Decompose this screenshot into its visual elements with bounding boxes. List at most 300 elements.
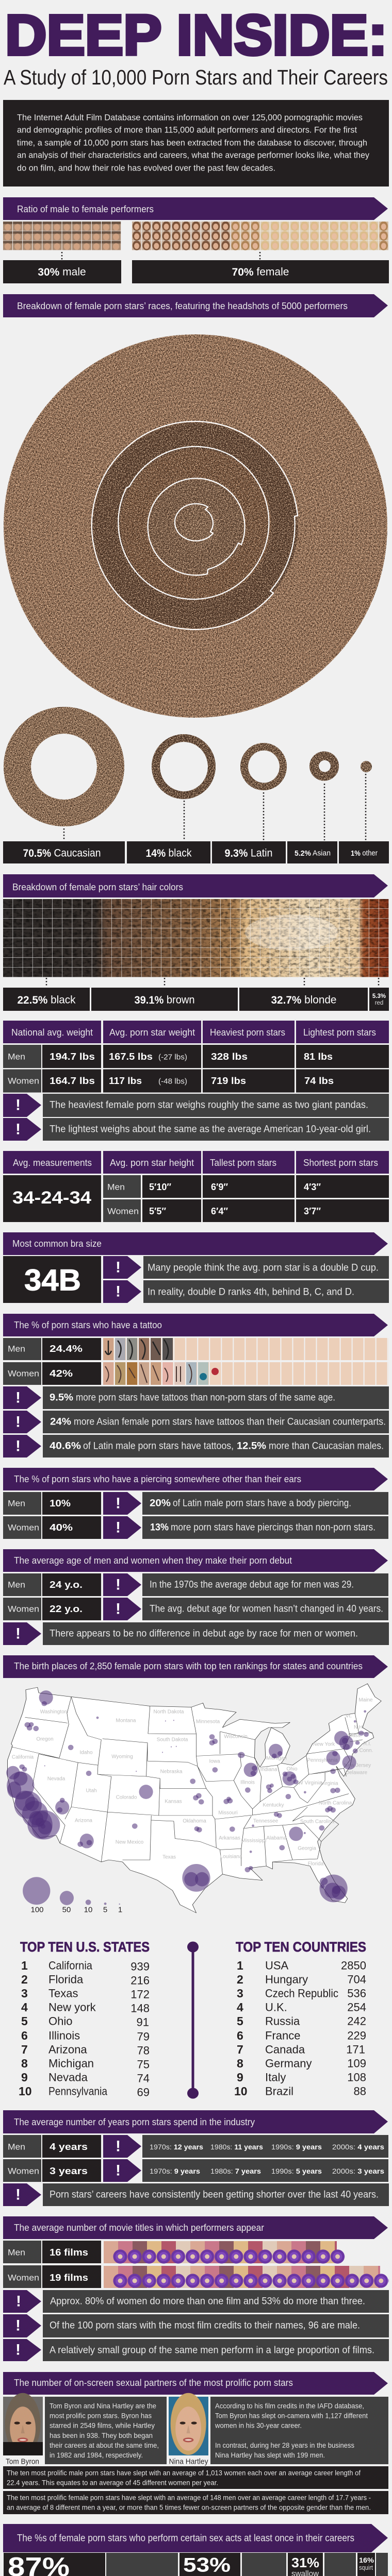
measurements header: Avg. measurements	[13, 1158, 92, 1168]
piercing row: men: of Latin male porn stars have a body piercing.	[173, 1498, 351, 1509]
section heading: bra size: Most common bra size	[12, 1239, 102, 1249]
section heading: hair colors: Breakdown of female porn stars’ hair colors	[12, 882, 183, 892]
career row: men	[3, 2135, 388, 2158]
map state names: South Carolina	[300, 1819, 335, 1825]
race rings row	[4, 707, 372, 840]
top ten countries: 109	[347, 2057, 366, 2070]
bubble size legend: 1	[118, 1905, 122, 1914]
debut row: men: Men	[8, 1580, 25, 1590]
top ten countries: Brazil	[265, 2084, 293, 2098]
top ten countries: TOP TEN COUNTRIES	[236, 1939, 366, 1955]
women weights: 164.7 lbs	[50, 1076, 95, 1086]
section heading: movie titles: The average number of movie titles in which performers appear	[14, 2223, 264, 2233]
treemap: sex act percentages	[4, 2552, 388, 2576]
map state names: Nebraska	[160, 1769, 183, 1774]
career row: men: 1990s: 9 years	[271, 2143, 322, 2151]
map state names: Oregon	[36, 1736, 54, 1742]
top ten countries: 5	[237, 2014, 243, 2028]
weight table	[3, 1021, 389, 1092]
piercing row: women: !	[116, 1519, 121, 1536]
note: lightest	[3, 1118, 389, 1141]
top ten states: TOP TEN U.S. STATES	[20, 1939, 150, 1955]
portrait: Tom Byron: Tom Byron	[6, 2458, 39, 2466]
weight table header: National avg. weight	[11, 1027, 93, 1038]
note: heaviest: !	[15, 1096, 21, 1114]
text: Byron and Hartley partners: In contrast, during her 28 years in the business	[215, 2442, 354, 2449]
note: 100 most credited	[3, 2314, 389, 2337]
piercing row: men: 10%	[50, 1498, 71, 1509]
map state names: Indiana	[260, 1767, 277, 1772]
stat: male average: The ten most prolific male porn stars have slept with an average of 1,013 women each over an average career length of	[7, 2469, 361, 2477]
map state names: Vt.	[346, 1714, 352, 1719]
text: prolific stars: starred in 2549 films, while Hartley	[50, 2421, 155, 2430]
debut row: men: 24 y.o.	[50, 1580, 83, 1590]
hair color percentages: red	[375, 1000, 383, 1006]
note: Latin male tattoos	[3, 1435, 389, 1458]
piercing row: men: Men	[8, 1498, 25, 1509]
male headshots	[3, 222, 121, 250]
map state names: New Jersey	[344, 1763, 371, 1768]
top ten countries: 3	[237, 1987, 243, 2000]
section heading: tattoos	[3, 1314, 388, 1336]
top ten countries: Hungary	[265, 1973, 308, 1986]
map outline and states	[8, 1684, 381, 1913]
career row: women: !	[116, 2162, 121, 2179]
piercing row: men	[3, 1492, 388, 1515]
top ten countries	[234, 1939, 366, 2098]
women weights: 74 lbs	[304, 1076, 334, 1086]
text: Byron and Hartley partners: Tom Byron has slept on-camera with 1,127 different	[215, 2412, 368, 2419]
top ten states: Ohio	[48, 2014, 72, 2028]
text: Byron and Hartley partners: women in his 30-year career.	[215, 2421, 302, 2430]
female share: 70% female	[232, 266, 289, 278]
text: prolific stars: Tom Byron and Nina Hartley are the	[50, 2402, 156, 2410]
map state names: Louisiana	[220, 1854, 242, 1860]
ring: other	[361, 761, 372, 772]
top ten countries: 9	[237, 2071, 243, 2084]
top ten countries: Canada	[265, 2043, 305, 2056]
top ten states: 5	[21, 2014, 28, 2028]
top ten countries: 8	[237, 2057, 243, 2070]
top ten states: 7	[21, 2043, 28, 2056]
map state names: New Mexico	[116, 1839, 144, 1845]
top ten countries: Germany	[265, 2057, 312, 2070]
hair color percentages: 39.1% brown	[134, 994, 195, 1006]
note: 100 most credited: !	[15, 2317, 21, 2334]
section heading: on-screen partners: The number of on-screen sexual partners of the most prolific porn stars	[14, 2378, 293, 2388]
debut row: women: Women	[8, 1604, 39, 1614]
men weights: Men	[8, 1052, 25, 1061]
map state names: California	[12, 1755, 34, 1760]
note: small group of men: A relatively small group of the same men perform in a large proportion of films.	[50, 2345, 374, 2355]
top ten countries: U.K.	[265, 2001, 287, 2013]
bubble size legend: 5	[103, 1905, 107, 1914]
top ten states: 216	[130, 1974, 150, 1987]
top ten states: 75	[137, 2058, 150, 2071]
map state names: W Virginia	[298, 1781, 322, 1786]
top ten states: Florida	[48, 1973, 84, 1986]
intro panel: do on film, and how their role has evolved over the past few decades.	[17, 163, 275, 173]
intro panel	[3, 100, 389, 187]
race percentages: 9.3% Latin	[225, 847, 272, 859]
note: careers getting shorter	[3, 2183, 389, 2206]
piercing row: women: 13%	[150, 1522, 169, 1533]
map state names: Pennsylvania	[307, 1758, 338, 1763]
bra size value	[3, 1256, 101, 1303]
film covers and discs: men	[104, 2241, 345, 2264]
section heading: piercings: The % of porn stars who have a piercing somewhere other than their ears	[14, 1474, 301, 1484]
top ten states: 4	[21, 2001, 28, 2014]
ring: Caucasian	[4, 707, 124, 826]
note: Asian female tattoos: !	[15, 1414, 21, 1430]
note: 80 percent of women	[3, 2290, 389, 2313]
top ten countries: 704	[347, 1973, 366, 1986]
note: double D rank	[103, 1280, 389, 1303]
map state names: Iowa	[209, 1759, 220, 1764]
note: tattoos vs non porn stars: 9.5%	[50, 1392, 73, 1403]
map state names: Tennessee	[253, 1819, 279, 1824]
section heading: on-screen partners	[3, 2372, 388, 2395]
career row: women: 1980s: 7 years	[210, 2167, 261, 2175]
top ten states: 2	[21, 1973, 28, 1986]
top ten states: 1	[21, 1959, 28, 1972]
note: 80 percent of women: !	[16, 2293, 21, 2310]
measurements table	[3, 1151, 389, 1222]
section heading: race breakdown	[3, 294, 388, 317]
ring: Asian	[309, 751, 339, 781]
note: double D belief	[103, 1256, 389, 1279]
map state names: Kansas	[165, 1799, 182, 1804]
career row: men: 2000s: 4 years	[332, 2143, 384, 2151]
male share	[3, 260, 121, 283]
note: 100 most credited: Of the 100 porn stars with the most film credits to their names, 96 are male.	[50, 2320, 360, 2331]
tattoo row: women: Women	[8, 1368, 39, 1379]
hair color percentages: 32.7% blonde	[271, 994, 336, 1006]
films row: men	[3, 2241, 345, 2264]
top ten states: 8	[21, 2057, 28, 2070]
text: Byron and Hartley partners: According to his film credits in the IAFD database,	[215, 2402, 364, 2410]
top ten states: Illinois	[48, 2029, 80, 2042]
top ten states: 74	[137, 2072, 150, 2084]
measurements header: Shortest porn stars	[303, 1158, 378, 1168]
top ten states: 9	[21, 2071, 28, 2084]
debut row: women: !	[116, 1600, 121, 1618]
map state names: Illinois	[240, 1780, 255, 1786]
map state names: Nevada	[47, 1776, 66, 1782]
map state names: Michigan	[266, 1756, 287, 1761]
tattoo row: women: 42%	[50, 1368, 73, 1379]
section heading: race breakdown: Breakdown of female porn stars’ races, featuring the headshots of 5000 performers	[17, 301, 348, 311]
top ten states: 3	[21, 1987, 28, 2000]
map state names: Idaho	[79, 1750, 93, 1756]
stat: female average	[3, 2491, 388, 2514]
top ten states: California	[48, 1959, 93, 1972]
top ten states: 10	[19, 2084, 32, 2098]
men weights: (-27 lbs)	[158, 1053, 187, 1061]
films row: men: 16 films	[50, 2247, 88, 2258]
weight table header: Heaviest porn stars	[210, 1027, 285, 1038]
note: Asian female tattoos: 24%	[50, 1417, 71, 1427]
top ten states: 6	[21, 2029, 28, 2042]
note: Latin male tattoos: !	[15, 1437, 21, 1455]
map state names: Ohio	[286, 1766, 298, 1772]
women heights	[103, 1199, 389, 1222]
map state names	[12, 1697, 373, 1867]
US map of birth places	[6, 1684, 381, 1914]
note: careers getting shorter: !	[15, 2187, 21, 2203]
top ten countries: 88	[354, 2084, 366, 2098]
career row: men: Men	[8, 2142, 25, 2151]
top ten states: Pennsylvania	[48, 2084, 108, 2098]
bubble size legend: 100	[30, 1905, 44, 1914]
section heading: piercings	[3, 1468, 388, 1490]
top ten states: Michigan	[48, 2057, 94, 2070]
11 percent	[376, 2553, 388, 2576]
stat: male average	[3, 2466, 388, 2489]
career row: men: 1980s: 11 years	[210, 2143, 263, 2151]
top ten countries: 2850	[341, 1959, 366, 1972]
section heading: years in the industry	[3, 2110, 388, 2133]
tattooed women cells	[103, 1362, 220, 1385]
piercing row: women	[3, 1516, 388, 1539]
intro panel: time, a sample of 10,000 porn stars has been extracted from the database to discover, through	[17, 138, 367, 147]
tattoo row: men	[3, 1338, 388, 1360]
top ten countries: 1	[237, 1959, 243, 1972]
bubble size legend: 10	[84, 1905, 92, 1914]
top ten states: Nevada	[48, 2071, 88, 2083]
portrait: Tom Byron	[3, 2393, 43, 2466]
women heights: 6′4″	[211, 1206, 228, 1216]
intro panel: The Internet Adult Film Database contains information on over 125,000 pornographic movies	[17, 112, 363, 123]
headshot mosaic disc	[4, 334, 387, 718]
films row: women	[3, 2265, 389, 2288]
measurements header: Tallest porn stars	[210, 1158, 276, 1168]
note: tattoos vs non porn stars: !	[15, 1389, 21, 1406]
text: prolific stars	[45, 2397, 167, 2464]
men heights	[103, 1175, 389, 1198]
top ten countries: 171	[346, 2043, 365, 2056]
tattoo row: men: 24.4%	[50, 1344, 83, 1354]
note: small group of men	[3, 2339, 389, 2361]
tattooed men cells	[103, 1338, 173, 1360]
piercing row: women: Women	[8, 1523, 39, 1532]
note: careers getting shorter: Porn stars’ careers have consistently been getting shorter over the last 40 years.	[50, 2190, 379, 2200]
debut row: women: 22 y.o.	[50, 1604, 83, 1614]
section heading: years in the industry: The average number of years porn stars spend in the industry	[14, 2117, 255, 2127]
map state names: North Dakota	[154, 1709, 184, 1715]
women weights	[3, 1070, 389, 1092]
men weights	[3, 1045, 389, 1068]
women weights: Women	[8, 1076, 39, 1086]
map state names: Conn.	[360, 1748, 373, 1754]
map state names: Delaware	[346, 1770, 368, 1775]
map bubbles	[6, 1690, 369, 1902]
map state names: Georgia	[298, 1845, 316, 1852]
text: Byron and Hartley partners	[210, 2397, 388, 2464]
hair color swatch grid	[3, 899, 389, 977]
map state names: N.H.	[354, 1725, 364, 1730]
top ten states: 79	[137, 2030, 150, 2043]
map state names: Wyoming	[111, 1754, 133, 1760]
map state names: Virginia	[321, 1781, 338, 1787]
average measurements: 34-24-34	[12, 1188, 91, 1208]
text: prolific stars: in 1982 and 1984, respectively.	[50, 2451, 143, 2459]
top ten states: New york	[48, 2001, 96, 2013]
map state names: Arizona	[75, 1818, 92, 1824]
top ten states: 91	[137, 2015, 149, 2029]
section: ratio of male to female performers	[3, 197, 389, 283]
women heights: 3′7″	[304, 1206, 321, 1216]
weight table header: Lightest porn stars	[303, 1027, 376, 1038]
section heading: hair colors	[3, 874, 388, 897]
note: Latin male tattoos: of Latin male porn stars have tattoos,	[83, 1440, 234, 1452]
top ten states	[19, 1939, 150, 2099]
map state names: Colorado	[116, 1795, 137, 1800]
top ten states: 148	[130, 2002, 150, 2014]
career row: women: 1970s: 9 years	[150, 2167, 200, 2175]
female headshots	[132, 222, 389, 250]
text: prolific stars: has been in 938. They both began	[50, 2432, 153, 2439]
women heights: 5′5″	[149, 1206, 166, 1216]
note: lightest: !	[15, 1121, 21, 1138]
hair color percentages: 5.3%	[372, 993, 386, 999]
text: Byron and Hartley partners: Nina Hartley has slept with 199 men.	[215, 2451, 325, 2459]
top ten states: Arizona	[48, 2043, 87, 2056]
career row: women: Women	[8, 2166, 39, 2176]
intro panel: an analysis of their characteristics and careers, what the average performer looks like, what they	[17, 150, 369, 160]
top ten states: 78	[137, 2044, 150, 2057]
men heights: 6′9″	[211, 1182, 228, 1192]
title: DEEP INSIDE:	[5, 4, 387, 67]
note: 80 percent of women: Approx. 80% of women do more than one film and 53% do more than three.	[50, 2296, 365, 2307]
section heading: debut age: The average age of men and women when they make their porn debut	[14, 1555, 292, 1566]
map state names: Arkansas	[219, 1835, 240, 1841]
piercing row: women: 40%	[50, 1522, 73, 1533]
map state names: Missouri	[218, 1810, 238, 1816]
bubble size legend	[23, 1877, 122, 1914]
portrait: Nina Hartley	[169, 2393, 208, 2466]
note: heaviest	[3, 1094, 389, 1117]
section: ratio of male to female performers: Ratio of male to female performers	[17, 204, 154, 214]
map state names: Alabama	[266, 1835, 287, 1841]
career row: women	[3, 2159, 388, 2182]
top ten countries: Russia	[265, 2014, 300, 2028]
section heading: tattoos: The % of porn stars who have a tattoo	[14, 1320, 162, 1330]
top ten countries: USA	[265, 1959, 289, 1972]
piercing row: men: 20%	[150, 1498, 171, 1509]
top ten states: Texas	[48, 1987, 78, 2000]
31 percent	[288, 2553, 323, 2576]
measurements header	[3, 1151, 389, 1174]
map state names: Kentucky	[263, 1802, 284, 1808]
career row: women: 1990s: 5 years	[271, 2167, 322, 2175]
bra size value: 34B	[24, 1263, 81, 1297]
map state names: Maine	[358, 1697, 373, 1703]
top ten countries: 536	[347, 1987, 366, 2000]
ring: Latin	[240, 743, 287, 790]
debut row: men: !	[116, 1577, 121, 1593]
bubble size legend: 50	[62, 1905, 71, 1914]
note: heaviest: The heaviest female porn star weighs roughly the same as two giant pandas.	[50, 1099, 368, 1111]
top ten countries: 6	[237, 2029, 243, 2042]
top ten countries: 242	[347, 2014, 366, 2028]
debut row: women	[3, 1598, 388, 1620]
race percentages: 70.5% Caucasian	[23, 847, 101, 859]
tattoo row: women	[3, 1362, 388, 1385]
62 percent	[106, 2553, 178, 2576]
map state names: South Dakota	[157, 1737, 188, 1742]
hair color percentages	[3, 988, 389, 1011]
hair color percentages: 22.5% black	[18, 994, 76, 1006]
films row: women: Women	[8, 2273, 39, 2282]
section heading: debut age	[3, 1549, 388, 1572]
race percentages: 5.2% Asian	[295, 849, 331, 857]
race percentages	[3, 841, 389, 863]
average measurements	[3, 1175, 101, 1222]
divider between top ten lists	[187, 1941, 199, 2099]
top ten states: 172	[130, 1988, 150, 2001]
career row: men: 1970s: 12 years	[150, 2143, 203, 2151]
race percentages: 14% black	[145, 847, 192, 859]
87 percent	[4, 2552, 105, 2576]
men heights: Men	[107, 1182, 125, 1192]
top ten countries: 7	[237, 2043, 243, 2056]
men heights: 4′3″	[304, 1182, 321, 1192]
note: double D rank: In reality, double D ranks 4th, behind B, C, and D.	[148, 1287, 354, 1297]
career row: men: 4 years	[50, 2142, 88, 2152]
piercing row: women: more porn stars have piercings than non-porn stars.	[171, 1522, 375, 1533]
53 percent	[179, 2553, 240, 2576]
top ten states: 939	[130, 1960, 150, 1973]
map state names: Florida	[308, 1861, 324, 1867]
top ten states: 69	[137, 2086, 150, 2099]
map state names: Oklahoma	[183, 1819, 206, 1824]
measurements header: Avg. porn star height	[110, 1158, 194, 1168]
map state names: New York	[313, 1741, 335, 1748]
portrait: Nina Hartley: Nina Hartley	[169, 2458, 208, 2466]
male share: 30% male	[38, 266, 86, 278]
map state names: Montana	[116, 1718, 136, 1724]
note: debut age by race: !	[15, 1625, 21, 1642]
top ten countries: France	[265, 2029, 300, 2042]
note: tattoos vs non porn stars	[3, 1386, 389, 1409]
stat: female average: The ten most prolific female porn stars have slept with an average of 148 men over an average career length of 17.7 years -	[7, 2494, 371, 2502]
note: double D belief: Many people think the avg. porn star is a double D cup.	[148, 1262, 379, 1274]
films row: men: Men	[8, 2247, 25, 2258]
career row: women: 3 years	[50, 2166, 88, 2176]
women weights: 719 lbs	[211, 1076, 246, 1086]
map state names: Minnesota	[196, 1719, 220, 1725]
28 percent	[324, 2553, 356, 2576]
section heading: sex acts	[3, 2524, 388, 2552]
top ten countries: 2	[237, 1973, 243, 1986]
career row: women: 2000s: 3 years	[332, 2167, 384, 2175]
weight table header	[3, 1021, 389, 1043]
films row: women: 19 films	[50, 2273, 88, 2283]
men weights: 328 lbs	[211, 1052, 248, 1062]
intro panel: and demographic profiles of more than 115,000 adult performers and directors. For the first	[17, 125, 357, 135]
stat: female average: an average of 8 different men a year, or more than 5 times fewer on-screen partners of the opposite gender than the men.	[7, 2504, 371, 2511]
note: small group of men: !	[15, 2341, 21, 2359]
top ten countries: 10	[234, 2084, 248, 2098]
ring: black	[152, 734, 216, 799]
map state names: Washington	[40, 1709, 67, 1715]
career row: men: !	[116, 2138, 121, 2155]
top ten countries: Czech Republic	[265, 1987, 338, 2000]
map state names: North Carolina	[319, 1800, 352, 1806]
note: tattoos vs non porn stars: more porn stars have tattoos than non-porn stars of the same age.	[76, 1392, 335, 1403]
53 percent: 53%	[183, 2554, 231, 2576]
